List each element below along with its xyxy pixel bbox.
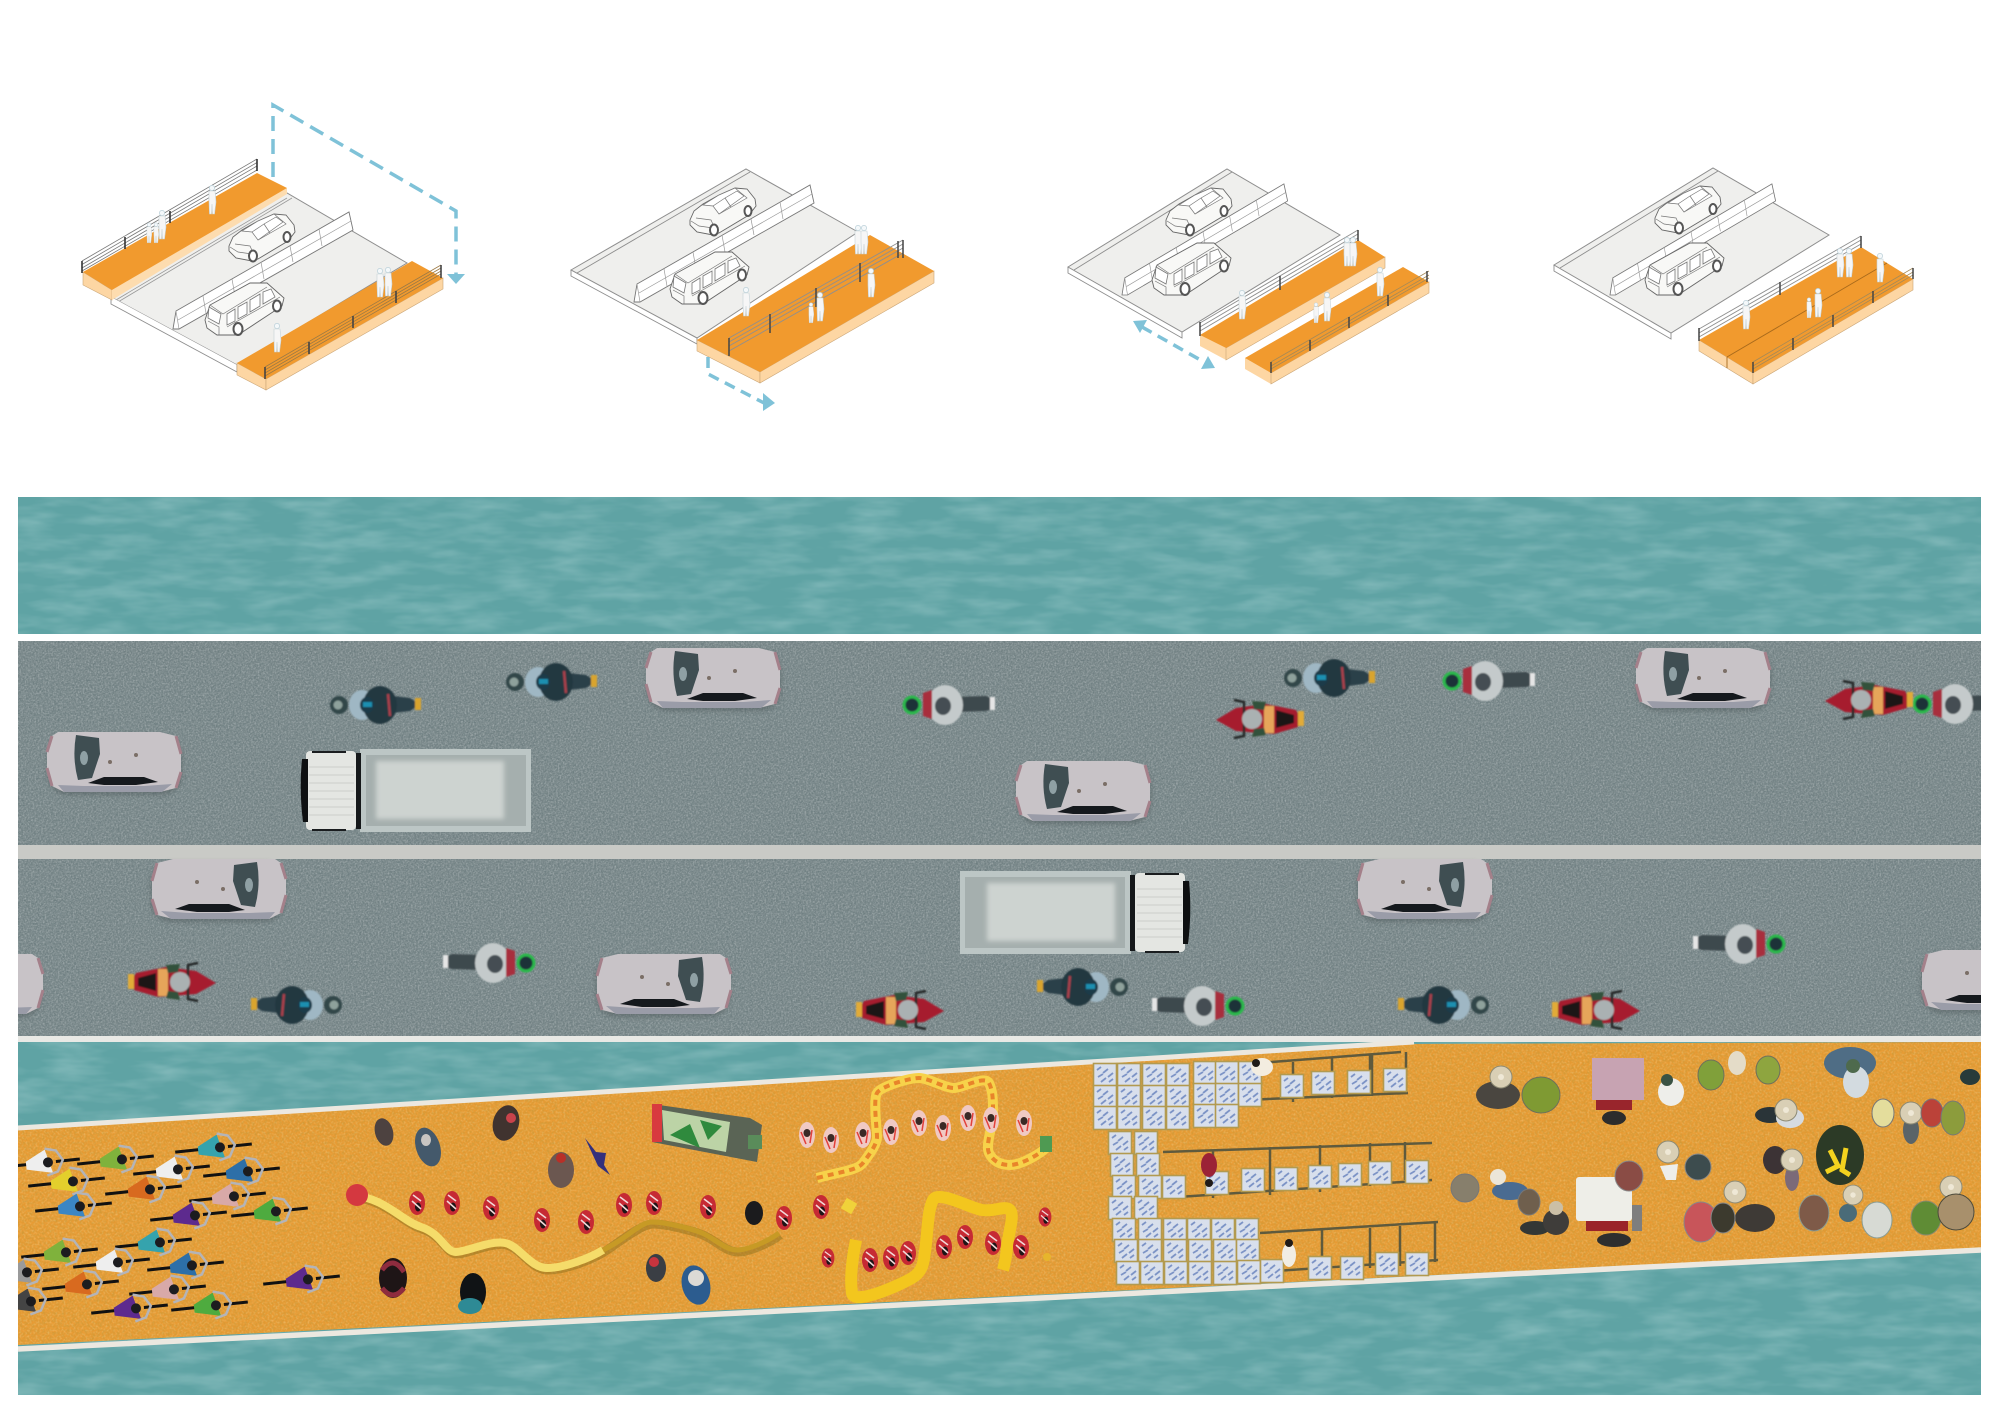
lower-left long dragon dance <box>346 1184 857 1270</box>
diagram 3 outer walkway <box>1245 267 1429 384</box>
diagram 2 deck edge <box>571 172 750 344</box>
cars, upper carriageway <box>47 648 1771 824</box>
diagram 1 people <box>147 185 392 352</box>
upper dragon dance <box>799 1078 1052 1178</box>
diagram 2 people <box>743 225 875 323</box>
diagram 3 double arrow <box>1133 320 1215 369</box>
diagram 2 car <box>690 188 756 236</box>
market vendors upper row <box>1476 1047 1980 1144</box>
diagram 1 road deck <box>111 193 407 372</box>
diagram 4: single wide promenade <box>1554 168 1913 384</box>
diagram 4 orange walkway <box>1699 236 1913 384</box>
diagram 4 car <box>1655 186 1721 234</box>
diagram 3 inner walkway <box>1200 230 1385 360</box>
diagram 1 dashed arrow <box>273 105 465 284</box>
diagram 2 road deck <box>571 169 858 338</box>
diagram 1 car <box>229 214 295 262</box>
panel: upper water <box>18 497 1981 634</box>
motorbikes, upper carriageway <box>330 659 2000 738</box>
diagram 3 median barrier <box>1122 184 1288 295</box>
food cart <box>652 1104 762 1162</box>
diagram 4 people <box>1743 248 1884 329</box>
diagram 1 median barrier <box>173 212 353 329</box>
diagram 4 road deck <box>1554 168 1829 333</box>
diagram 4 median barrier <box>1610 184 1776 295</box>
diagram 3 people <box>1239 237 1384 323</box>
diagram 2 median barrier <box>634 185 814 302</box>
flower vendor <box>1763 1125 1864 1191</box>
road median <box>18 845 1981 859</box>
market vendors lower row <box>1451 1141 1974 1247</box>
panel: road <box>18 641 1981 1037</box>
road edge kerb <box>18 1036 1981 1042</box>
plan strip <box>0 497 2000 1395</box>
promenade lower edge <box>18 1250 1981 1349</box>
cars, lower carriageway <box>0 859 2000 1017</box>
pedestrians <box>372 1102 715 1314</box>
diagram 3 car <box>1166 188 1232 236</box>
diagram 3: promenade split with gap <box>1068 169 1429 384</box>
diagram 3 road deck <box>1068 169 1340 332</box>
promenade upper edge <box>18 1042 1414 1128</box>
lower yellow dragon dance <box>822 1197 1051 1297</box>
truck heading right <box>960 871 1190 954</box>
truck heading left <box>301 749 531 832</box>
cyclists <box>0 1130 341 1326</box>
diagram 4 deck edge <box>1554 171 1718 339</box>
motorbikes, lower carriageway <box>128 924 1784 1029</box>
diagram 1 left orange walkway <box>82 159 287 300</box>
diagram 2: promenade extended with central fence <box>571 169 934 411</box>
diagram 2 dashed arrow <box>708 357 775 411</box>
diagram 1 right orange walkway <box>237 261 443 390</box>
diagram 1 van <box>205 283 284 335</box>
panel: orange promenade <box>18 1042 1981 1349</box>
diagram 2 orange walkway <box>697 235 934 383</box>
diagram 3 deck edge <box>1068 172 1232 338</box>
panel: lower water <box>18 1036 1981 1395</box>
diagram 1: raised promenades on both sides of the road <box>82 105 465 390</box>
drying racks: lower block <box>1112 1218 1438 1284</box>
diagram 4 van <box>1645 243 1724 295</box>
diagram 3 van <box>1152 243 1231 295</box>
drying racks: middle block <box>1108 1132 1432 1220</box>
drying racks: upper block <box>1094 1052 1408 1130</box>
diagram 2 van <box>670 252 749 304</box>
